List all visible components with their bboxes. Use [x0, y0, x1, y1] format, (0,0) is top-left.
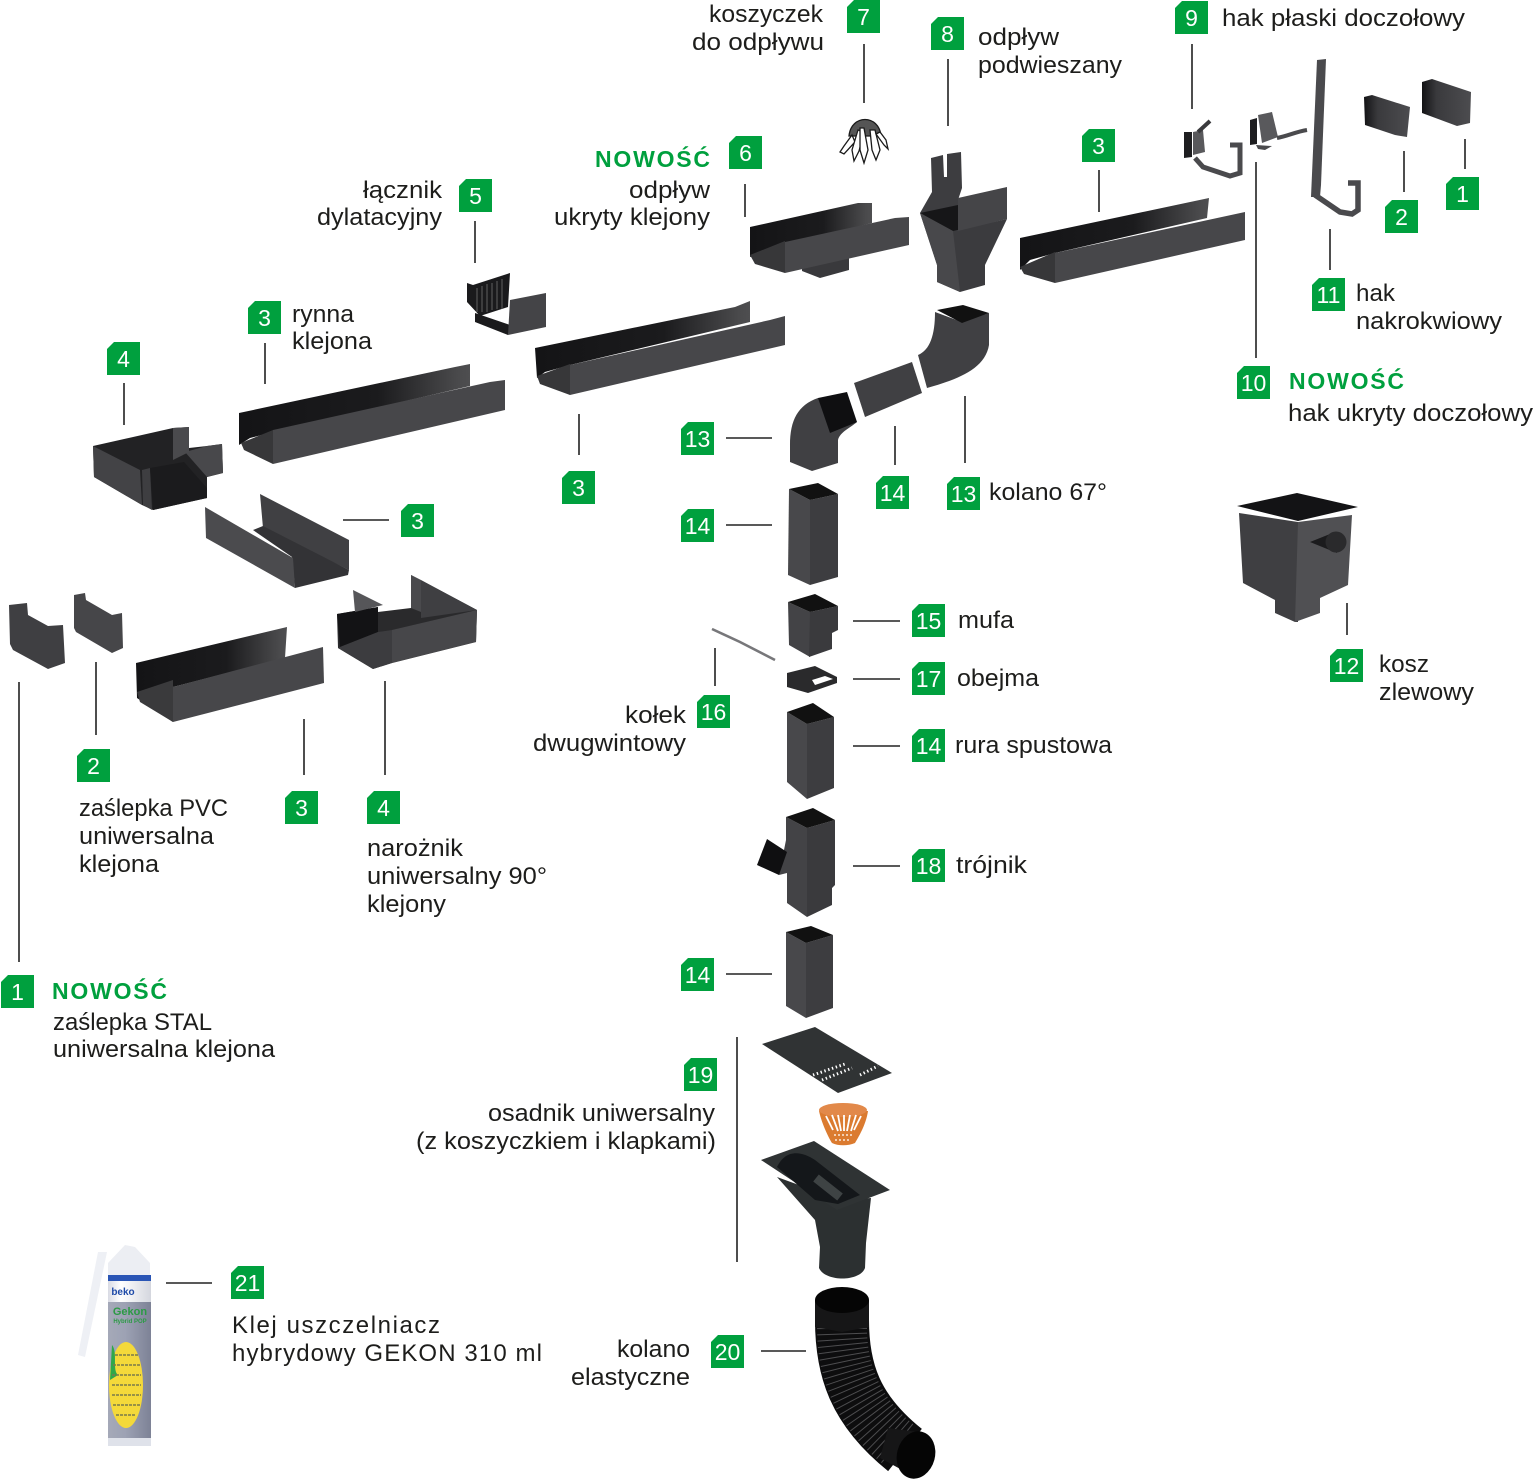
text: nowosc zaslepka STAL: NOWOŚĆ: [52, 977, 167, 1004]
badge 12: 12: [1334, 653, 1359, 679]
text: rynna klejona: [292, 301, 373, 355]
leader 3 lower: [303, 719, 305, 775]
badge 1 lower: 1: [11, 979, 24, 1005]
badge 10: [1237, 366, 1270, 399]
leader 14 tilted: [894, 426, 896, 465]
text: nowosc odplyw ukryty klejony: [554, 145, 711, 231]
text: kosz zlewowy: [1379, 651, 1474, 706]
leader 13 right: [964, 396, 966, 463]
leader 3 top right: [1098, 170, 1100, 212]
leader 6: [744, 184, 746, 217]
badge 3 middle: [401, 504, 434, 537]
badge 14 tilted: 14: [880, 480, 905, 506]
badge 18: 18: [916, 853, 941, 879]
product: hook 10: [1250, 112, 1307, 150]
badge 5: [459, 179, 492, 212]
text: rynna klejona: rynna: [292, 301, 355, 328]
text: nowosc odplyw ukryty klejony: odpływ: [629, 177, 711, 204]
badge 14 tilted: [876, 476, 909, 509]
text: hak nakrokwiowy: [1356, 280, 1502, 335]
badge 14 upper: [681, 509, 714, 542]
leader 4 lower: [384, 681, 386, 775]
text: rynna klejona: klejona: [292, 328, 373, 355]
leader 14 lower-mid: [853, 745, 900, 747]
badge 7: [847, 0, 880, 33]
text: kolek dwugwintowy: [533, 702, 687, 757]
badge 2 top right: [1385, 200, 1418, 233]
product: downpipe upper: [788, 483, 838, 585]
badge 8: 8: [941, 21, 954, 47]
text: rura spustowa: rura spustowa: [955, 732, 1113, 759]
product: hanging outlet 8: [920, 152, 1007, 292]
badge 14 bottom: [681, 958, 714, 991]
badge 7: 7: [857, 4, 870, 30]
text: nowosc zaslepka STAL: [52, 977, 276, 1063]
product: tilted pipe 14: [854, 362, 922, 417]
badge 6: [729, 136, 762, 169]
badge 15: 15: [916, 608, 941, 634]
product: end cap 1 (top right): [1422, 79, 1471, 126]
text: kolano elastyczne: [571, 1336, 690, 1391]
product: dowel kolek: [712, 629, 775, 660]
leader 21: [166, 1282, 212, 1284]
text: mufa: mufa: [958, 607, 1015, 634]
text: zaslepka PVC: zaślepka PVC: [79, 795, 228, 822]
badge 13 right: 13: [951, 481, 976, 507]
badge 3 rynna: 3: [258, 305, 271, 331]
badge 1 top right: 1: [1456, 181, 1469, 207]
product: orange basket: [819, 1103, 868, 1145]
leader 1 lower: [18, 682, 20, 962]
badge 3 top right: [1082, 129, 1115, 162]
badge 13 right: [947, 477, 980, 510]
text: odplyw podwieszany: odpływ: [978, 24, 1060, 51]
product: adhesive tube: [78, 1245, 151, 1446]
badge 19: 19: [688, 1062, 713, 1088]
text: osadnik uniwersalny: osadnik uniwersalny: [488, 1100, 715, 1127]
badge 21: [231, 1266, 264, 1299]
leader 17: [853, 678, 900, 680]
text: hak nakrokwiowy: hak: [1356, 280, 1396, 307]
product: upper elbow 67: [918, 305, 989, 388]
product: downpipe middle: [787, 703, 834, 799]
leader 4 upper: [123, 383, 125, 425]
product: adhesive tube: Gekon: [113, 1306, 147, 1318]
product: end cap PVC 2 (left): [74, 593, 123, 653]
leader 13 left: [726, 437, 772, 439]
text: lacznik dylatacyjny: łącznik: [363, 177, 443, 204]
text: nowosc hak ukryty doczolowy: NOWOŚĆ: [1289, 367, 1404, 394]
product: connector dylatacyjny: [467, 273, 546, 335]
leader 15: [853, 620, 900, 622]
product: gutter centre: [535, 301, 785, 395]
badge 4 lower: [367, 791, 400, 824]
badge 13 left: 13: [685, 426, 710, 452]
text: klej uszczelniacz: hybrydowy GEKON 310 ml: [232, 1340, 542, 1367]
leader 14 upper: [726, 524, 772, 526]
product: tee trojnik: [757, 808, 835, 917]
product: leaf basket 7: [840, 120, 888, 163]
text: naroznik uniwersalny: uniwersalny 90°: [367, 863, 547, 890]
text: naroznik uniwersalny: klejony: [367, 891, 446, 918]
badge 14 bottom: 14: [685, 962, 710, 988]
leader 10: [1255, 162, 1257, 358]
text: naroznik uniwersalny: [367, 835, 547, 918]
leader 2 top right: [1403, 151, 1405, 192]
badge 1 top right: [1446, 177, 1479, 210]
product: gutter right: [1020, 198, 1245, 283]
product: settler body: [761, 1141, 890, 1278]
text: nowosc zaslepka STAL: uniwersalna klejona: [53, 1036, 276, 1063]
product: end cap steel 1 (left): [9, 603, 65, 669]
text: nowosc hak ukryty doczolowy: hak ukryty doczołowy: [1288, 400, 1533, 427]
badge 10: 10: [1241, 370, 1266, 396]
product: downpipe lower: [786, 926, 833, 1018]
badge 14 upper: 14: [685, 513, 710, 539]
product: gutter rynna klejona: [239, 364, 505, 464]
product: adhesive tube: Hybrid POP: [113, 1319, 147, 1325]
leader 8: [947, 59, 949, 126]
text: lacznik dylatacyjny: [317, 177, 443, 231]
text: hak plaski doczolowy: hak płaski doczołowy: [1222, 5, 1465, 32]
product: hook 11 rafter: [1311, 59, 1358, 214]
product: bracket obejma: [787, 666, 837, 693]
text: kolek dwugwintowy: kołek: [625, 702, 687, 729]
product: socket mufa: [788, 594, 838, 657]
badge 17: 17: [916, 666, 941, 692]
badge 20: 20: [715, 1339, 740, 1365]
leader 12: [1346, 603, 1348, 635]
badge 8: [931, 17, 964, 50]
text: osadnik uniwersalny: (z koszyczkiem i klapkami): [416, 1128, 716, 1155]
text: kosz zlewowy: kosz: [1379, 651, 1429, 678]
badge 12: [1330, 649, 1363, 682]
product: gutter lower-left: [136, 627, 324, 722]
text: zaslepka PVC: [79, 795, 228, 878]
badge 19: [684, 1058, 717, 1091]
product: hidden outlet gutter 6: [750, 203, 909, 278]
leader 14 bottom: [726, 973, 772, 975]
leader 2 lower: [95, 662, 97, 735]
leader 3 middle: [343, 519, 389, 521]
text: odplyw podwieszany: [978, 24, 1122, 79]
badge 20: [711, 1335, 744, 1368]
product: corner 90 lower: [337, 575, 477, 669]
badge 1 lower: [1, 975, 34, 1008]
product: corner 90 upper: [93, 427, 223, 510]
badge 21: 21: [235, 1270, 260, 1296]
text: nowosc zaslepka STAL: zaślepka STAL: [53, 1009, 212, 1036]
text: kolek dwugwintowy: dwugwintowy: [533, 730, 686, 757]
badge 15: [912, 604, 945, 637]
text: kolano elastyczne: kolano: [617, 1336, 690, 1363]
badge 9: [1175, 1, 1208, 34]
leader 3 rynna: [264, 343, 266, 384]
product: flexible elbow: [815, 1287, 941, 1481]
badge 3 lower: 3: [295, 795, 308, 821]
leader 19: [736, 1037, 738, 1262]
product: hook 9: [1184, 121, 1240, 176]
text: osadnik uniwersalny: [416, 1100, 716, 1155]
text: nowosc hak ukryty doczolowy: [1288, 367, 1533, 427]
leader 20: [761, 1350, 806, 1352]
leader 5: [474, 221, 476, 263]
product: adhesive tube: beko: [111, 1287, 135, 1298]
badge 3 centre: [562, 471, 595, 504]
product: sink box 12: [1237, 493, 1358, 622]
badge 3 top right: 3: [1092, 133, 1105, 159]
leader 9: [1191, 44, 1193, 109]
badge 14 lower-mid: [912, 729, 945, 762]
leader 18: [853, 865, 900, 867]
badge 18: [912, 849, 945, 882]
product: gutter middle pointing right: [205, 494, 349, 588]
text: nowosc odplyw ukryty klejony: NOWOŚĆ: [595, 145, 710, 172]
leader 7: [863, 44, 865, 103]
product: end cap 2 (top right): [1364, 95, 1410, 137]
leader 3 centre: [578, 414, 580, 455]
text: koszyczek do odplywu: [692, 1, 824, 56]
badge 4 upper: 4: [117, 346, 130, 372]
badge 4 lower: 4: [377, 795, 390, 821]
text: kolano elastyczne: elastyczne: [571, 1364, 690, 1391]
text: koszyczek do odplywu: koszyczek: [709, 1, 824, 28]
badge 16: 16: [701, 699, 726, 725]
badge 2 lower: [77, 749, 110, 782]
text: klej uszczelniacz: [232, 1312, 542, 1367]
badge 3 centre: 3: [572, 475, 585, 501]
text: koszyczek do odplywu: do odpływu: [692, 29, 824, 56]
badge 3 middle: 3: [411, 508, 424, 534]
text: kolano 67: kolano 67°: [989, 479, 1107, 506]
badge 11: 11: [1317, 282, 1340, 308]
text: zaslepka PVC: uniwersalna: [79, 823, 215, 850]
text: nowosc odplyw ukryty klejony: ukryty klejony: [554, 204, 710, 231]
badge 4 upper: [107, 342, 140, 375]
text: kosz zlewowy: zlewowy: [1379, 679, 1474, 706]
badge 2 top right: 2: [1395, 204, 1408, 230]
text: lacznik dylatacyjny: dylatacyjny: [317, 204, 442, 231]
badge 3 rynna: [248, 301, 281, 334]
text: zaslepka PVC: klejona: [79, 851, 160, 878]
text: obejma: obejma: [957, 665, 1040, 692]
text: hak nakrokwiowy: nakrokwiowy: [1356, 308, 1502, 335]
badge 16: [697, 695, 730, 728]
badge 6: 6: [739, 140, 752, 166]
text: klej uszczelniacz: Klej uszczelniacz: [232, 1312, 440, 1339]
text: trojnik: trójnik: [956, 852, 1028, 879]
badge 2 lower: 2: [87, 753, 100, 779]
badge 11: [1312, 278, 1345, 311]
badge 3 lower: [285, 791, 318, 824]
leader 16: [714, 648, 716, 686]
text: naroznik uniwersalny: narożnik: [367, 835, 464, 862]
badge 13 left: [681, 422, 714, 455]
product: lower elbow 13: [790, 392, 857, 471]
leader 11: [1329, 229, 1331, 270]
product: settler cover: [762, 1027, 892, 1093]
badge 17: [912, 662, 945, 695]
leader 1 top right: [1464, 139, 1466, 169]
badge 9: 9: [1185, 5, 1198, 31]
badge 5: 5: [469, 183, 482, 209]
text: odplyw podwieszany: podwieszany: [978, 52, 1122, 79]
badge 14 lower-mid: 14: [916, 733, 941, 759]
